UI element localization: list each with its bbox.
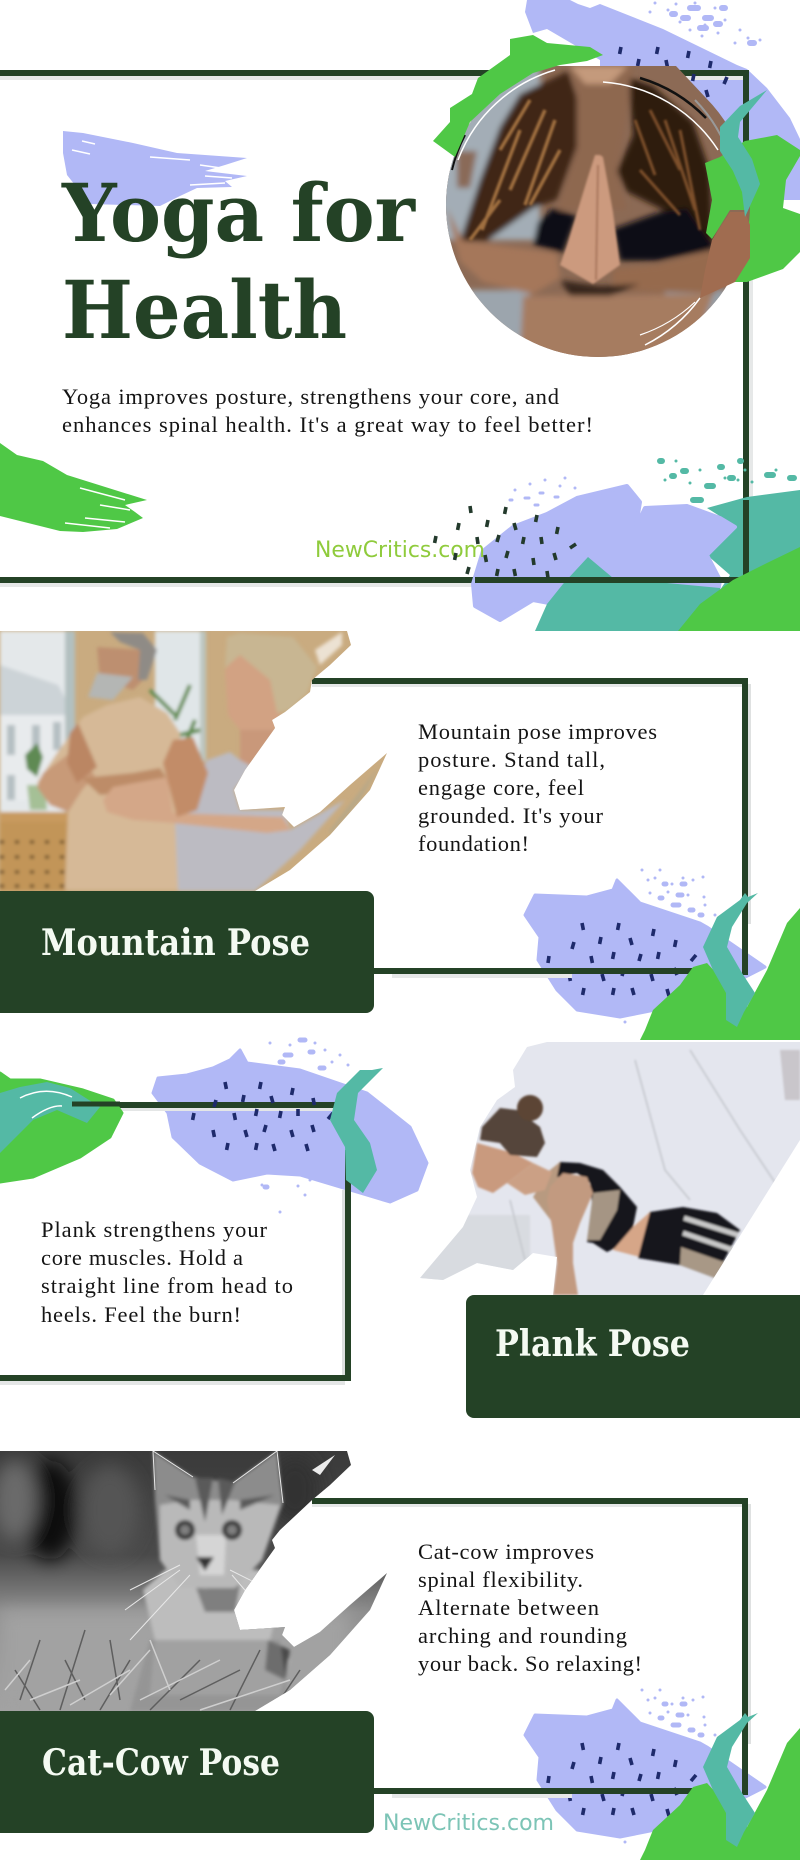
title bar: Cat-Cow Pose — [42, 1742, 280, 1784]
watermark: NewCritics.com — [315, 538, 485, 563]
description text — [418, 719, 657, 856]
frame — [312, 681, 751, 978]
white streaks — [20, 1091, 72, 1118]
title bar: Mountain Pose — [41, 922, 310, 964]
intro text: Yoga improves posture, strengthens your core, and — [62, 384, 559, 409]
hero frame bottom overlay — [475, 500, 746, 580]
green paint right — [700, 135, 800, 282]
green and teal decor — [640, 893, 800, 1040]
cat-cow pose section — [0, 1451, 800, 1860]
description text: spinal flexibility. — [418, 1567, 583, 1592]
description text: straight line from head to — [41, 1273, 293, 1298]
photo: woman in plank — [400, 1040, 800, 1300]
teal splatter — [660, 461, 794, 500]
description text: foundation! — [418, 831, 529, 856]
teal wedge lower — [535, 557, 720, 631]
green paint bottom right — [678, 547, 800, 631]
title bar — [0, 1711, 374, 1833]
description text — [41, 1217, 293, 1327]
hero frame — [0, 73, 753, 587]
title bar: Plank Pose — [495, 1323, 690, 1365]
description text: arching and rounding — [418, 1623, 627, 1648]
description text: grounded. It's your — [418, 803, 604, 828]
description text: engage core, feel — [418, 775, 584, 800]
hero section — [0, 0, 800, 631]
watermark: NewCritics.com — [383, 1811, 554, 1836]
lavender splatter — [262, 1040, 348, 1212]
photo: couple in mountain pose — [0, 631, 400, 891]
title bar — [466, 1295, 800, 1418]
description text: core muscles. Hold a — [41, 1245, 243, 1270]
lavender paint — [153, 1050, 427, 1202]
description text: Plank strengthens your — [41, 1217, 268, 1242]
teal ribbon — [720, 90, 767, 217]
circle brush arcs — [452, 70, 738, 345]
hand on green — [700, 212, 750, 298]
description text: Mountain pose improves — [418, 719, 657, 744]
description text — [418, 1539, 642, 1676]
lavender splatter bottom — [510, 478, 575, 505]
teal ribbon left — [0, 1082, 100, 1153]
photo: black and white cat — [0, 1451, 400, 1711]
title: Health — [62, 263, 347, 357]
green brush left — [0, 443, 147, 532]
lavender paint top right — [525, 0, 800, 200]
decor behind frame — [525, 1690, 765, 1842]
description text: Cat-cow improves — [418, 1539, 594, 1564]
green splash on photo top left — [433, 35, 603, 157]
description text: heels. Feel the burn! — [41, 1302, 241, 1327]
title — [61, 166, 416, 357]
frame — [0, 1105, 348, 1385]
plank pose section — [0, 1040, 800, 1418]
title bar — [0, 891, 374, 1013]
mountain pose section — [0, 631, 800, 1040]
decor behind frame — [525, 870, 765, 1022]
description text: your back. So relaxing! — [418, 1651, 642, 1676]
green paint left — [0, 1073, 122, 1182]
intro text: enhances spinal health. It's a great way to feel better! — [62, 412, 593, 437]
navy ticks — [193, 1082, 333, 1151]
hero photo: woman in prayer pose — [446, 66, 750, 357]
dark line over ribbon — [72, 1102, 120, 1106]
lavender brush behind title — [63, 131, 247, 206]
description text: Alternate between — [418, 1595, 599, 1620]
title: Yoga for — [61, 166, 416, 260]
description text: posture. Stand tall, — [418, 747, 605, 772]
frame — [312, 1501, 751, 1798]
navy ticks top right — [620, 47, 727, 97]
dark ticks bottom — [435, 506, 576, 578]
lavender splatter top right — [650, 3, 760, 43]
green and teal decor — [640, 1713, 800, 1860]
intro text — [62, 384, 593, 437]
lavender paint bottom — [473, 486, 735, 622]
green overlap on photo right — [705, 141, 748, 239]
teal ribbon right — [330, 1068, 383, 1193]
teal paint right — [700, 490, 800, 631]
